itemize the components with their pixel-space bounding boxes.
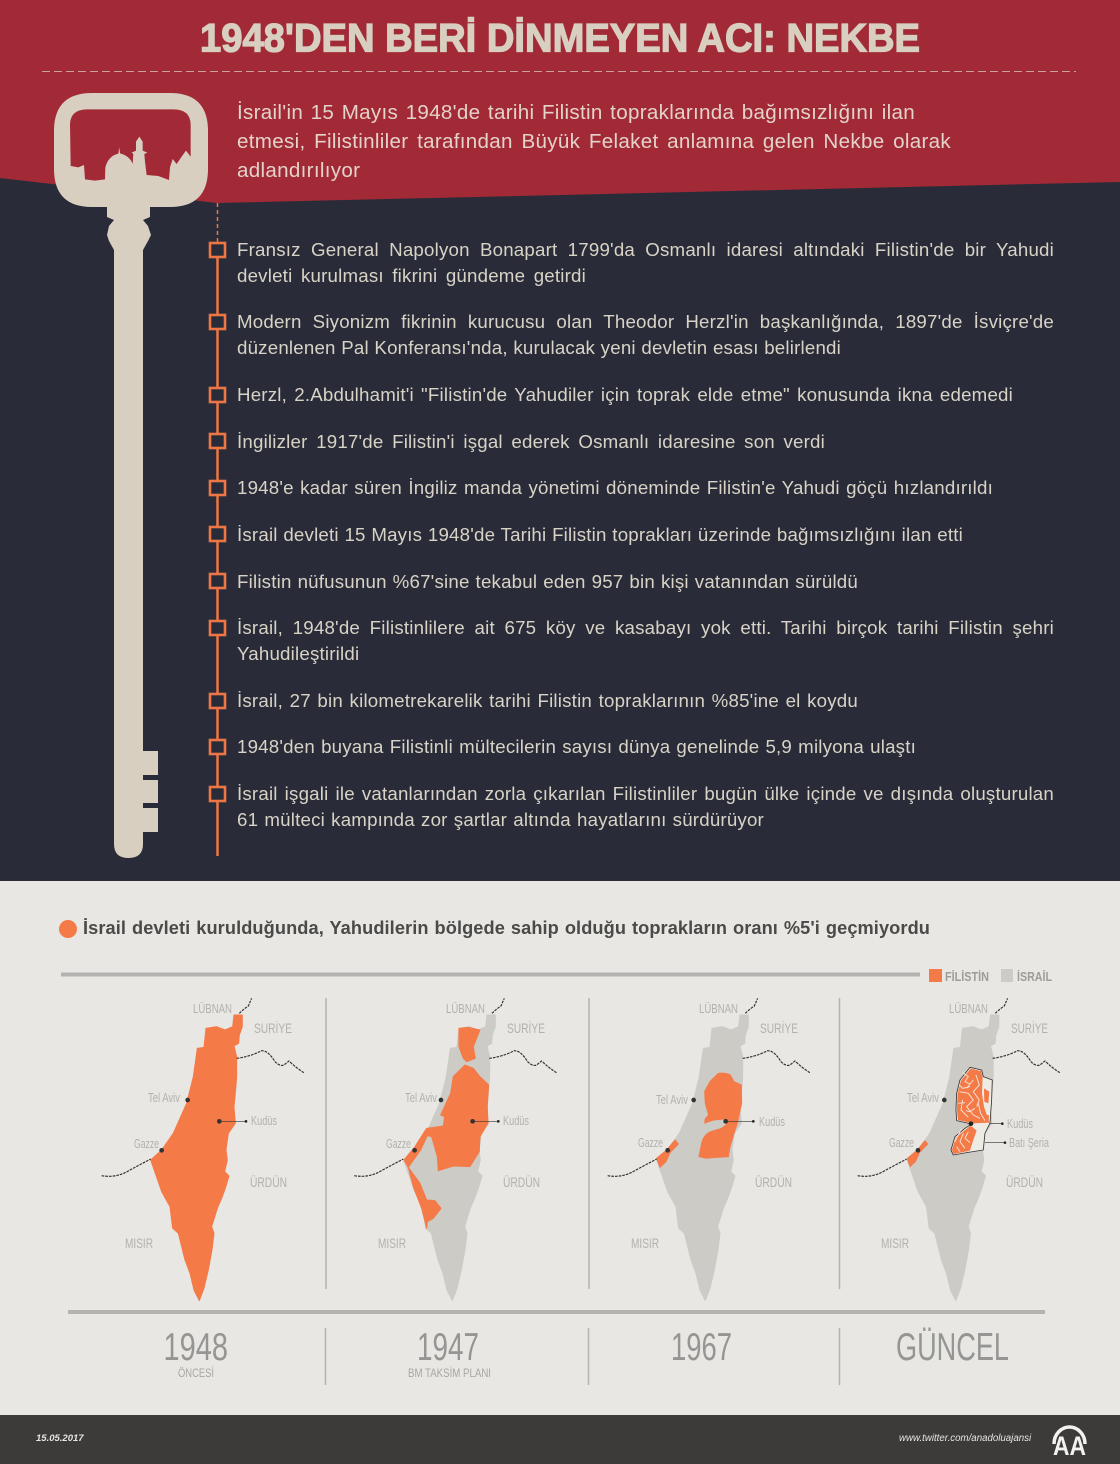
maps heading: İsrail devleti kurulduğunda, Yahudilerin bölgede sahip olduğu toprakların oranı %5'i geçmiyordu (83, 918, 930, 938)
map: 1967 (608, 998, 810, 1301)
intro text (237, 101, 951, 182)
year label: 1947 BM taksim planı: 1947 (417, 1326, 479, 1369)
map: 1947 BM taksim planı (354, 998, 557, 1301)
year label: 1948 öncesi: ÖNCESİ (178, 1366, 214, 1380)
map: 1947 BM taksim planı: MISIR (378, 1235, 406, 1251)
timeline item 11 (237, 783, 1054, 830)
timeline item 5: 1948'e kadar süren İngiliz manda yönetimi döneminde Filistin'e Yahudi göçü hızlandırıldı (237, 477, 993, 498)
timeline item 8 (237, 617, 1054, 664)
map: 1948 öncesi: MISIR (125, 1235, 153, 1251)
intro text: etmesi, Filistinliler tarafından Büyük Felaket anlamına gelen Nekbe olarak (237, 130, 951, 153)
panel: maps background (0, 881, 1120, 1415)
panel: footer bar (0, 1415, 1120, 1464)
panel: red header (0, 0, 1120, 203)
timeline item 9: İsrail, 27 bin kilometrekarelik tarihi Filistin topraklarının %85'ine el koydu (237, 690, 858, 711)
map: 1947 BM taksim planı: SURİYE (507, 1019, 545, 1036)
icon: heading bullet (59, 920, 77, 938)
map: 1948 öncesi: Kudüs (251, 1114, 277, 1128)
map: 1947 BM taksim planı: ÜRDÜN (503, 1173, 540, 1190)
legend (929, 969, 1052, 984)
timeline item 1: Fransız General Napolyon Bonapart 1799'da Osmanlı idaresi altındaki Filistin'de bir Yahudi (237, 239, 1054, 260)
title: 1948'DEN BERİ DİNMEYEN ACI: NEKBE (200, 16, 920, 60)
timeline line (216, 203, 218, 856)
map: 1967: MISIR (631, 1235, 659, 1251)
timeline markers (210, 243, 225, 801)
intro text: adlandırılıyor (237, 159, 360, 182)
year label: 1948 öncesi (164, 1326, 228, 1380)
map: güncel: Kudüs (1007, 1117, 1033, 1131)
year label: 1947 BM taksim planı: BM TAKSİM PLANI (408, 1366, 491, 1380)
timeline item 8: Yahudileştirildi (237, 643, 359, 664)
map: 1948 öncesi: SURİYE (254, 1019, 292, 1036)
intro text: İsrail'in 15 Mayıs 1948'de tarihi Filistin topraklarında bağımsızlığını ilan (237, 101, 915, 124)
map: 1948 öncesi: ÜRDÜN (250, 1173, 287, 1190)
map: 1967: ÜRDÜN (755, 1173, 792, 1190)
timeline item 7: Filistin nüfusunun %67'sine tekabul eden 957 bin kişi vatanından sürüldü (237, 571, 858, 592)
map: güncel: Gazze (889, 1136, 914, 1150)
year label: 1967: 1967 (671, 1326, 732, 1369)
timeline item 2 (237, 311, 1054, 358)
map: güncel (858, 998, 1060, 1301)
map: 1948 öncesi: LÜBNAN (193, 1002, 232, 1016)
timeline item 11: 61 mülteci kampında zor şartlar altında hayatlarını sürdürüyor (237, 809, 764, 830)
timeline item 2: Modern Siyonizm fikrinin kurucusu olan Theodor Herzl'in başkanlığında, 1897'de İsviçre'de (237, 311, 1054, 332)
map: 1948 öncesi: Tel Aviv (148, 1091, 181, 1105)
timeline item 6: İsrail devleti 15 Mayıs 1948'de Tarihi Filistin toprakları üzerinde bağımsızlığını ilan etti (237, 524, 963, 545)
map: güncel: Tel Aviv (907, 1091, 940, 1105)
icon: Anadolu Ajansı logo: AA (1053, 1431, 1086, 1461)
map: güncel: MISIR (881, 1235, 909, 1251)
icon: key with Jerusalem skyline (54, 93, 208, 858)
map: 1947 BM taksim planı: Kudüs (503, 1114, 529, 1128)
map: 1947 BM taksim planı: Gazze (386, 1137, 411, 1151)
panel: dark timeline background (0, 0, 1120, 881)
timeline item 1 (237, 239, 1054, 286)
timeline item 11: İsrail işgali ile vatanlarından zorla çıkarılan Filistinliler bugün ülke içinde ve dışında oluşturulan (237, 783, 1054, 804)
map: güncel: ÜRDÜN (1006, 1173, 1043, 1190)
map: 1967: LÜBNAN (699, 1002, 738, 1016)
map: 1967: Tel Aviv (656, 1093, 689, 1107)
timeline item 1: devleti kurulması fikrini gündeme getirdi (237, 265, 586, 286)
map: 1967: SURİYE (760, 1019, 798, 1036)
map: 1947 BM taksim planı: LÜBNAN (446, 1002, 485, 1016)
map: 1948 öncesi: Gazze (134, 1137, 159, 1151)
timeline item 2: düzenlenen Pal Konferansı'nda, kurulacak yeni devletin esası belirlendi (237, 337, 841, 358)
legend: İSRAİL (1017, 969, 1052, 984)
timeline item 10: 1948'den buyana Filistinli mültecilerin sayısı dünya genelinde 5,9 milyona ulaştı (237, 736, 916, 757)
map: 1948 öncesi (102, 998, 304, 1301)
map: güncel: LÜBNAN (949, 1002, 988, 1016)
footer url: www.twitter.com/anadoluajansi (899, 1433, 1031, 1444)
map: 1967: Kudüs (759, 1115, 785, 1129)
map: 1947 BM taksim planı: Tel Aviv (405, 1091, 438, 1105)
year label: 1947 BM taksim planı (408, 1326, 491, 1380)
timeline item 8: İsrail, 1948'de Filistinlilere ait 675 köy ve kasabayı yok etti. Tarihi birçok tarihi Filistin şehri (237, 617, 1054, 638)
timeline item 3: Herzl, 2.Abdulhamit'i "Filistin'de Yahudiler için toprak elde etme" konusunda ikna edemedi (237, 384, 1013, 405)
map: güncel: Batı Şeria (1009, 1136, 1049, 1150)
timeline item 4: İngilizler 1917'de Filistin'i işgal ederek Osmanlı idaresine son verdi (237, 431, 825, 452)
legend: FİLİSTİN (945, 969, 989, 984)
year label: 1948 öncesi: 1948 (164, 1326, 228, 1369)
year label: güncel: GÜNCEL (896, 1326, 1009, 1369)
map: güncel: SURİYE (1011, 1019, 1048, 1036)
map: 1967: Gazze (638, 1136, 663, 1150)
footer date: 15.05.2017 (36, 1433, 84, 1444)
